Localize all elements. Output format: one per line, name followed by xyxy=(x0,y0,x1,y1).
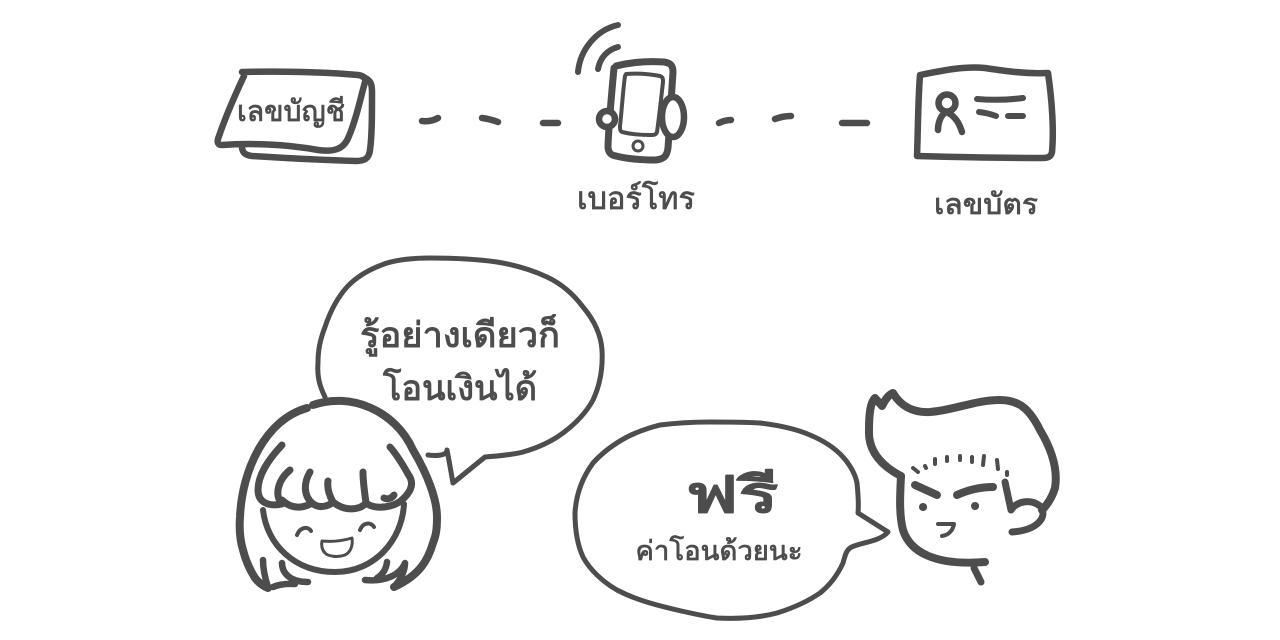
character: boy xyxy=(869,393,1056,582)
ear xyxy=(1005,482,1043,532)
bubble text: girl: โอนเงินได้ xyxy=(383,368,537,408)
mouth xyxy=(322,538,352,556)
speech bubble: boy xyxy=(575,422,888,618)
fringe xyxy=(258,445,411,509)
hair outline xyxy=(240,408,307,588)
bubble text: girl xyxy=(360,314,560,408)
icon: phone with signal xyxy=(578,25,684,160)
label: account number: เลขบัญชี xyxy=(237,96,345,128)
eyes xyxy=(297,524,374,535)
face outline xyxy=(900,476,985,563)
icon: ID card xyxy=(917,67,1053,158)
bubble text: boy: ฟรี xyxy=(686,467,779,523)
speech bubble: girl xyxy=(318,258,602,483)
bubble text: girl: รู้อย่างเดียวก็ xyxy=(360,314,560,356)
bubble text: boy xyxy=(636,467,802,566)
face outline xyxy=(263,504,404,572)
label: card number: เลขบัตร xyxy=(934,189,1038,221)
dashed connector: right xyxy=(719,116,867,123)
eyebrows xyxy=(915,485,993,495)
hair outline xyxy=(869,393,1056,510)
label: phone number: เบอร์โทร xyxy=(577,181,695,216)
dashed connector: left xyxy=(422,118,558,123)
neck xyxy=(974,568,981,582)
icon: account book xyxy=(218,72,372,161)
mouth xyxy=(938,524,954,536)
character: girl xyxy=(240,401,437,588)
hair tips xyxy=(263,560,308,587)
bubble text: boy: ค่าโอนด้วยนะ xyxy=(636,536,802,566)
eyes xyxy=(923,506,975,507)
hairline ticks xyxy=(913,456,1007,475)
